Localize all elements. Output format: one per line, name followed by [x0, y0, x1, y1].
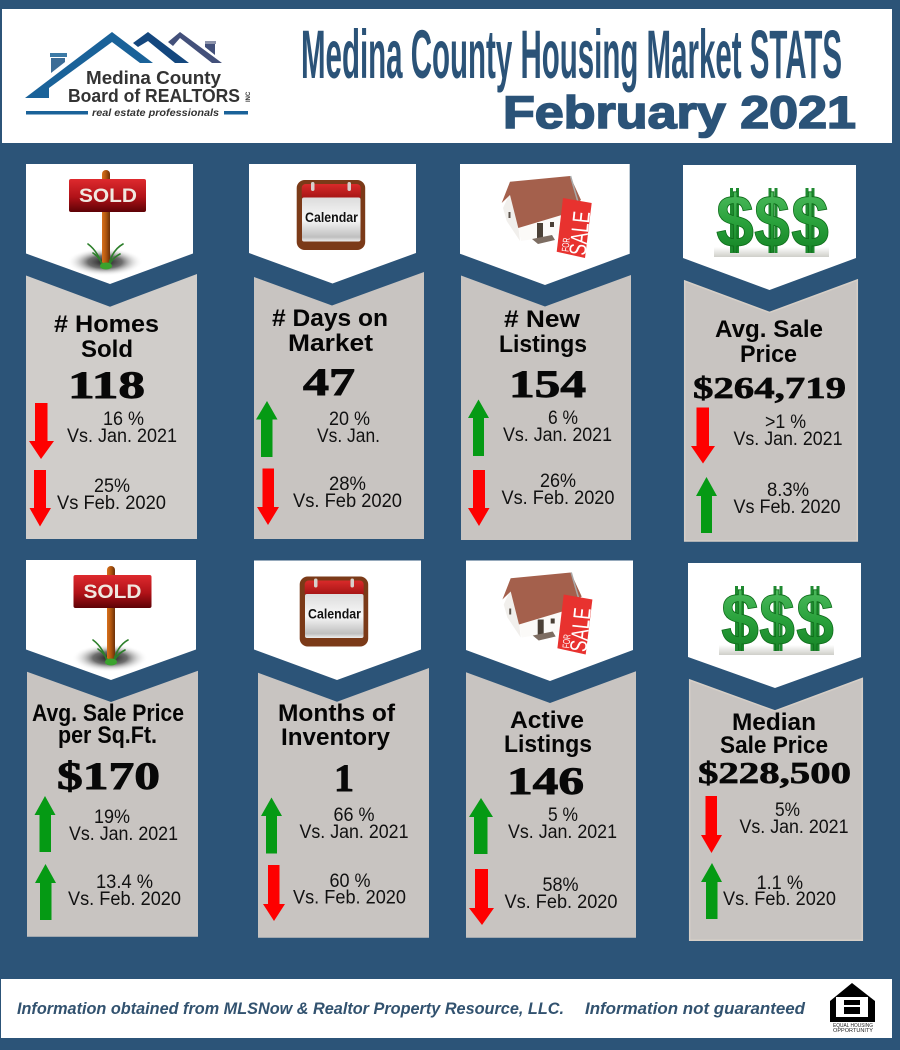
heading: [54, 311, 159, 363]
logo: Medina County Board of REALTORS: Medina County: [86, 68, 221, 88]
icon: sold sign: [72, 566, 152, 672]
change vs February: [293, 871, 406, 908]
change vs January: [508, 805, 617, 843]
arrow: up: [701, 863, 722, 919]
icon: sold sign: [67, 170, 146, 276]
value: $170: [57, 755, 160, 798]
icon: equal housing opportunity: EQUAL HOUSING: [833, 1023, 873, 1029]
stat panel: [254, 272, 424, 539]
arrow: down: [263, 865, 285, 921]
change vs February: 58%: [542, 875, 579, 896]
change vs February: 8.3%: [767, 480, 809, 501]
icon: sold sign: SOLD: [84, 581, 142, 603]
heading: Price: [740, 341, 797, 368]
stat panel: [258, 668, 429, 938]
icon: house for sale: SALE: [565, 210, 596, 257]
icon: equal housing opportunity: OPPORTUNITY: [833, 1028, 874, 1034]
stat panel: [27, 671, 198, 937]
heading: [32, 700, 184, 749]
panel: months of inventory: [254, 560, 429, 938]
arrow: down: [691, 408, 715, 464]
panel: active listings: [466, 560, 636, 938]
arrow: up: [35, 864, 56, 920]
change vs January: 66 %: [334, 805, 375, 826]
change vs February: 26%: [540, 471, 576, 492]
change vs January: Vs. Jan. 2021: [734, 429, 842, 450]
panel: average sale price: [683, 165, 857, 541]
icon panel: [460, 164, 630, 285]
change vs February: [504, 875, 618, 913]
stat panel: [466, 671, 636, 938]
heading: Listings: [499, 331, 587, 358]
icon: house for sale: FOR: [561, 237, 573, 252]
change vs February: Vs. Feb. 2020: [502, 488, 614, 509]
heading: # Homes: [54, 311, 159, 338]
icon panel: [466, 560, 633, 681]
heading: [278, 700, 396, 751]
change vs February: Vs. Feb. 2020: [504, 892, 618, 913]
value: 118: [68, 364, 145, 407]
icon: house for sale: SALE: [565, 607, 597, 653]
heading: [720, 709, 828, 759]
icon: calendar: Calendar: [305, 209, 358, 225]
heading: Listings: [504, 731, 592, 758]
change vs January: [503, 408, 612, 446]
logo: Medina County Board of REALTORS: Board of REALTORS: [68, 86, 240, 106]
subtitle: February 2021: [503, 87, 856, 138]
icon panel: [688, 563, 861, 688]
logo: Medina County Board of REALTORS: INC: [246, 91, 252, 102]
icon: calendar: [297, 180, 365, 250]
value: 1: [334, 757, 354, 800]
heading: [272, 305, 388, 357]
arrow: down: [701, 796, 722, 853]
icon: dollar signs: $: [796, 578, 834, 661]
icon panel: [683, 165, 856, 290]
icon: dollar signs: $: [716, 180, 754, 263]
heading: per Sq.Ft.: [58, 722, 157, 749]
icon: dollar signs: $: [791, 180, 829, 263]
change vs January: 20 %: [329, 409, 370, 430]
change vs January: Vs. Jan. 2021: [69, 824, 178, 845]
panel: new listings: [460, 164, 631, 540]
change vs February: 1.1 %: [756, 873, 803, 894]
icon: house for sale: [502, 572, 597, 654]
change vs January: 19%: [94, 807, 130, 828]
value: $228,500: [698, 755, 851, 790]
change vs January: 16 %: [103, 409, 144, 430]
change vs February: 60 %: [330, 871, 371, 892]
heading: Active: [510, 707, 584, 734]
panel: median sale price: [688, 563, 862, 940]
icon: dollar signs: $: [754, 180, 790, 263]
icon: dollar signs: $: [759, 578, 795, 661]
icon: equal housing opportunity: [830, 983, 875, 1034]
arrow: down: [468, 470, 490, 526]
heading: Sold: [81, 336, 133, 363]
change vs February: Vs Feb. 2020: [734, 497, 840, 518]
icon panel: [26, 560, 196, 680]
arrow: up: [261, 798, 282, 854]
change vs February: [293, 474, 402, 512]
change vs February: [68, 872, 181, 910]
change vs January: Vs. Jan. 2021: [67, 426, 177, 447]
icon: house for sale: [502, 176, 596, 258]
arrow: up: [468, 400, 489, 456]
change vs January: [300, 805, 408, 843]
icon: calendar: [300, 576, 368, 646]
heading: [715, 316, 823, 368]
change vs February: [734, 480, 840, 518]
value: 154: [509, 363, 586, 406]
change vs February: [57, 476, 166, 514]
heading: Sale Price: [720, 732, 828, 759]
panel: days on market: [249, 164, 424, 539]
change vs January: 5 %: [548, 805, 578, 826]
arrow: down: [29, 403, 54, 459]
heading: Avg. Sale: [715, 316, 823, 343]
stat panel: [461, 275, 631, 540]
change vs January: [317, 409, 380, 447]
change vs January: Vs. Jan. 2021: [300, 822, 408, 843]
change vs February: Vs. Feb. 2020: [68, 889, 181, 910]
icon: dollar signs: [714, 180, 829, 263]
icon panel: [254, 560, 421, 680]
icon: dollar signs: $: [721, 578, 759, 661]
change vs February: [502, 471, 614, 509]
disclaimer: Information not guaranteed: [585, 999, 806, 1018]
arrow: up: [34, 796, 56, 852]
icon panel: [249, 164, 416, 284]
heading: Inventory: [281, 724, 391, 751]
icon: sold sign: SOLD: [79, 185, 137, 207]
change vs January: Vs. Jan. 2021: [508, 822, 617, 843]
change vs January: [734, 412, 842, 450]
change vs February: Vs. Feb. 2020: [723, 889, 836, 910]
change vs February: 25%: [94, 476, 130, 497]
panel: price per square foot: [26, 560, 198, 937]
change vs February: Vs. Feb 2020: [293, 491, 402, 512]
value: 146: [507, 760, 584, 803]
footer banner: [1, 979, 892, 1038]
value: 47: [303, 361, 355, 404]
arrow: up: [469, 798, 493, 854]
heading: [504, 707, 592, 758]
source note: Information obtained from MLSNow & Realtor Property Resource, LLC.: [17, 999, 564, 1018]
change vs January: >1 %: [765, 412, 806, 433]
heading: Avg. Sale Price: [32, 700, 184, 727]
header banner: [2, 9, 892, 143]
change vs January: [67, 409, 177, 447]
arrow: down: [469, 869, 494, 925]
stat panel: [685, 280, 857, 541]
change vs January: Vs. Jan.: [317, 426, 380, 447]
heading: [499, 306, 587, 358]
heading: Months of: [278, 700, 396, 727]
change vs January: Vs. Jan. 2021: [740, 817, 848, 838]
value: $264,719: [693, 370, 846, 405]
change vs February: 28%: [329, 474, 366, 495]
change vs January: [740, 800, 848, 838]
icon panel: [26, 164, 193, 284]
change vs February: Vs Feb. 2020: [57, 493, 166, 514]
arrow: down: [257, 468, 279, 525]
stat panel: [690, 678, 862, 940]
logo: Medina County Board of REALTORS: real estate professionals: [92, 107, 219, 119]
change vs January: 6 %: [548, 408, 578, 429]
change vs February: Vs. Feb. 2020: [293, 888, 406, 908]
change vs January: 5%: [775, 800, 800, 821]
change vs January: Vs. Jan. 2021: [503, 425, 612, 446]
change vs January: [69, 807, 178, 845]
arrow: up: [256, 401, 278, 457]
arrow: up: [696, 477, 717, 533]
stat panel: [26, 274, 197, 539]
icon: calendar: Calendar: [308, 606, 361, 622]
logo: Medina County Board of REALTORS: [25, 32, 252, 119]
change vs February: [723, 873, 836, 910]
panel: homes sold: [26, 164, 197, 539]
icon: house for sale: FOR: [561, 634, 574, 649]
arrow: down: [30, 470, 51, 526]
icon: dollar signs: [719, 578, 834, 661]
heading: Median: [732, 709, 816, 736]
change vs February: 13.4 %: [96, 872, 153, 893]
heading: Market: [288, 330, 373, 357]
heading: # Days on: [272, 305, 388, 332]
heading: # New: [504, 306, 580, 333]
